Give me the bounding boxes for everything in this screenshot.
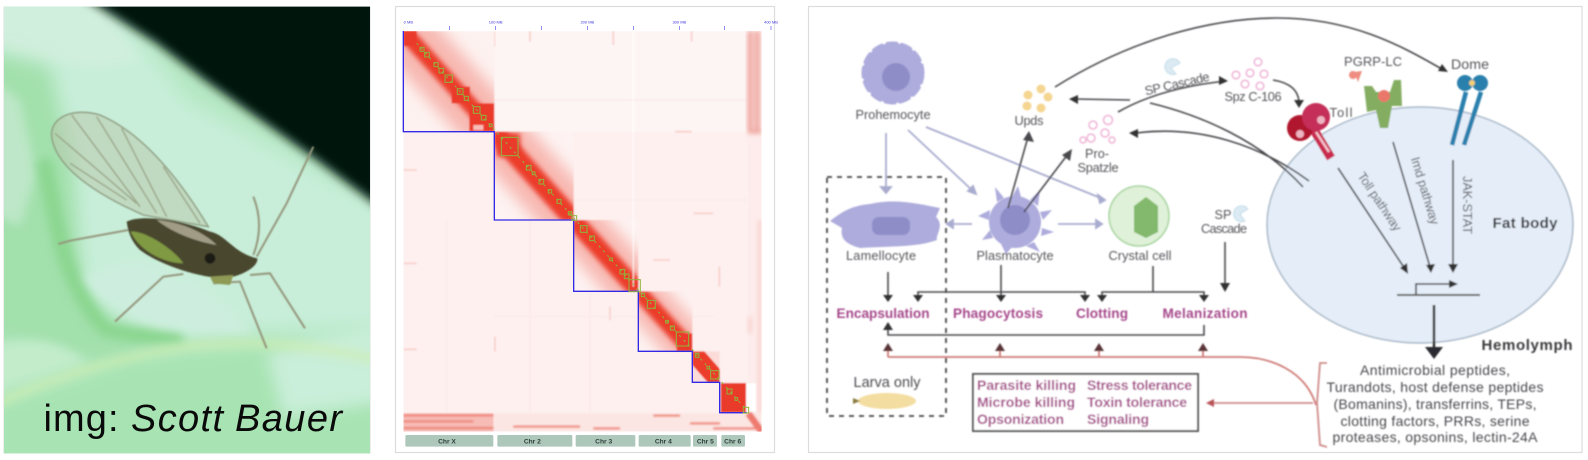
- Dome receptor: Dome: [1451, 57, 1489, 73]
- diagonal contig trace: [417, 43, 747, 410]
- lamellocyte: Lamellocyte: [846, 249, 916, 263]
- PGRP-LC receptor: [1344, 54, 1402, 128]
- effector molecules list: Turandots, host defense peptides: [1326, 379, 1544, 395]
- effector molecules list: proteases, opsonins, lectin-24A: [1332, 429, 1538, 445]
- top axis: 400 MB: [764, 19, 778, 24]
- effector arrows: [883, 265, 1209, 335]
- prohemocyte: Prohemocyte: [856, 108, 930, 122]
- effector function box: Toxin tolerance: [1087, 394, 1187, 410]
- effector function box: Parasite killing: [977, 377, 1076, 393]
- Dome receptor: [1451, 57, 1489, 145]
- plasmatocyte: Plasmatocyte: [976, 249, 1054, 263]
- chromosome labels: Chr X: [438, 438, 456, 445]
- dashed larva-only box: [827, 177, 946, 416]
- prohemocyte: [856, 43, 930, 122]
- effector function box: Opsonization: [977, 411, 1064, 427]
- effector molecules list: Antimicrobial peptides,: [1360, 362, 1510, 378]
- effector labels: Encapsulation: [836, 306, 930, 321]
- contig squares: [420, 47, 749, 413]
- long arrow Upds to Dome: [1055, 18, 1448, 87]
- SP cascade to Spz C-106: SP Cascade: [1143, 70, 1211, 98]
- chromosome labels: Chr 2: [524, 438, 541, 445]
- Toll receptor: Toll: [1330, 106, 1352, 120]
- chromosome labels: Chr 5: [697, 438, 714, 445]
- effector labels: Melanization: [1162, 306, 1248, 321]
- Imd pathway: [1393, 142, 1442, 273]
- effector function box: Microbe killing: [977, 394, 1075, 410]
- signal return arrows: [1069, 95, 1309, 187]
- SP cascade right: [1201, 206, 1248, 292]
- hemolymph label: Hemolymph: [1482, 337, 1572, 354]
- panel: aphid photograph: [4, 6, 370, 454]
- Spz C-106: [1224, 58, 1282, 104]
- Toll pathway: Toll pathway: [1355, 170, 1404, 234]
- plasmatocyte: [976, 186, 1054, 263]
- top axis: 100 MB: [489, 19, 503, 24]
- chromosome labels: Chr 4: [655, 438, 672, 445]
- effector molecules list: clotting factors, PRRs, serine: [1340, 413, 1530, 429]
- fat body: Fat body: [1492, 215, 1558, 232]
- SP cascade right: Cascade: [1201, 222, 1247, 236]
- crystal cell: [1108, 186, 1172, 263]
- scaffold boundaries: [403, 31, 747, 413]
- effector labels: [836, 306, 1248, 321]
- output arrow: [1425, 305, 1443, 359]
- Toll pathway: [1338, 168, 1408, 274]
- chromosome 3 domain: [574, 220, 638, 291]
- lamellocyte: [830, 201, 940, 263]
- Toll receptor: [1287, 103, 1352, 158]
- effector molecules list: [1326, 362, 1544, 445]
- effector labels: Phagocytosis: [953, 306, 1043, 321]
- SP cascade right: SP: [1215, 208, 1231, 222]
- chromosome 2 domain: [494, 132, 574, 220]
- wing: [52, 112, 208, 227]
- insect: [52, 112, 313, 348]
- panel: immune response pathway diagram: [808, 6, 1582, 452]
- SP cascade to Spz C-106: [1118, 59, 1228, 112]
- JAK-STAT: [1448, 160, 1474, 273]
- photo credit: Scott: [131, 398, 224, 440]
- top axis: [404, 19, 778, 30]
- Imd pathway: Imd pathway: [1408, 155, 1442, 227]
- panel: Hi-C contact map: [396, 6, 778, 452]
- effector molecules list: (Bomanins), transferrins, TEPs,: [1334, 396, 1536, 412]
- chromosome labels: Chr 3: [595, 438, 612, 445]
- cell to signal arrows: [1008, 131, 1072, 212]
- promoter: [1397, 280, 1480, 295]
- top axis: 300 MB: [672, 19, 687, 24]
- Spz C-106: Spz C-106: [1224, 90, 1282, 104]
- chromosome 4 domain: [638, 291, 692, 351]
- photo credit: img:: [44, 398, 118, 440]
- Pro-Spatzle: [1078, 116, 1118, 175]
- effector function box: [973, 374, 1198, 431]
- Spz to Toll arrow: [1273, 80, 1304, 108]
- body: [127, 218, 257, 278]
- Pro-Spatzle: Spatzle: [1078, 161, 1118, 175]
- top axis: 200 MB: [580, 19, 595, 24]
- effector function box: Stress tolerance: [1087, 377, 1192, 393]
- top axis: 0 MB: [404, 19, 413, 24]
- effector function box: Signaling: [1087, 411, 1149, 427]
- chromosome 6 domain: [721, 383, 746, 413]
- chromosome labels: Chr 6: [724, 438, 741, 445]
- photo credit: Bauer: [235, 398, 343, 440]
- hemolymph feedback arrows: [883, 343, 1327, 447]
- chromosome X domain: [403, 31, 495, 132]
- larva only: [853, 375, 921, 409]
- Upds: [1014, 84, 1052, 128]
- Pro-Spatzle: Pro-: [1085, 147, 1109, 161]
- crystal cell: Crystal cell: [1108, 249, 1172, 263]
- larva only: Larva only: [854, 375, 921, 391]
- fat body: [1267, 107, 1573, 343]
- chromosome labels: [405, 435, 745, 447]
- photo: insect on leaf: [4, 6, 370, 454]
- PGRP-LC receptor: PGRP-LC: [1344, 54, 1402, 69]
- photo credit: [44, 398, 343, 440]
- effector labels: Clotting: [1076, 306, 1128, 321]
- JAK-STAT: JAK-STAT: [1460, 176, 1474, 234]
- heatmap: [403, 31, 762, 432]
- differentiation arrows: [881, 127, 1105, 228]
- legs and antennae: [58, 147, 313, 348]
- Upds: Upds: [1014, 114, 1044, 128]
- chromosome 5 domain: [692, 351, 720, 382]
